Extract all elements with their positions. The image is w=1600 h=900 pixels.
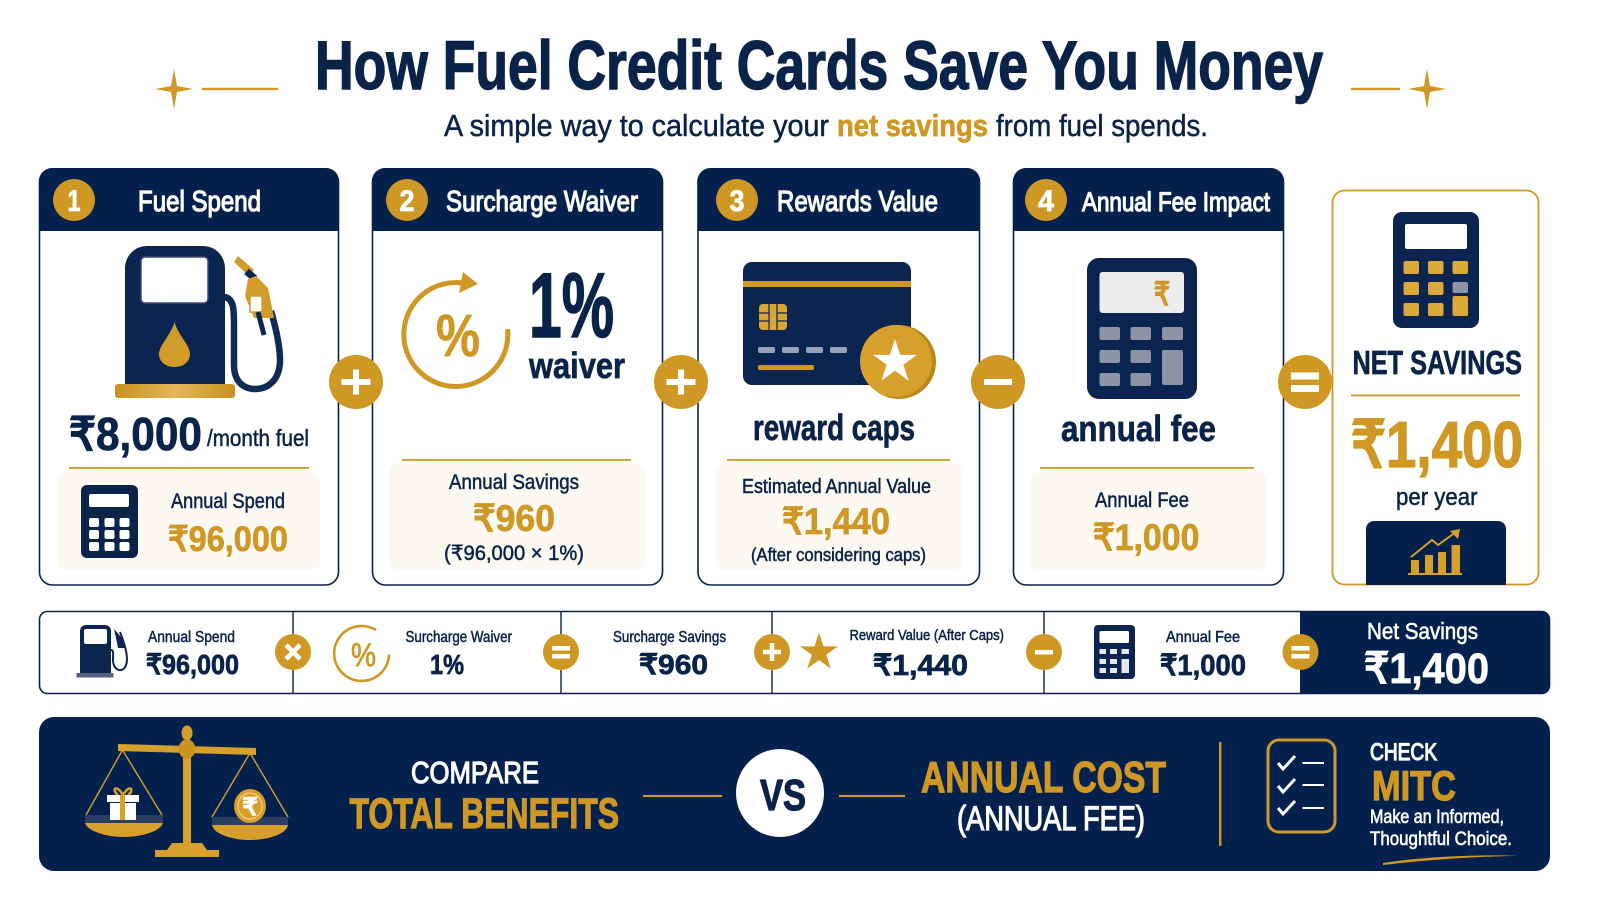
icon: calculator	[81, 485, 138, 558]
result: annual savings	[389, 463, 645, 570]
subtitle: net savings	[837, 108, 988, 143]
text: check MITC: Thoughtful Choice.	[1370, 829, 1512, 850]
result: annual fee: ₹1,000	[1093, 517, 1200, 558]
heading: surcharge waiver: Surcharge Waiver	[446, 186, 638, 218]
icon: star	[800, 632, 838, 669]
stat: monthly fuel: ₹8,000	[69, 408, 202, 460]
panel: compare banner	[39, 717, 1550, 871]
operator: equals	[543, 634, 579, 670]
panel: formula strip	[40, 611, 1550, 694]
item: annual fee: Annual Fee	[1166, 629, 1240, 646]
item: surcharge waiver: 1%	[430, 649, 464, 680]
icon: small percent: %	[351, 637, 376, 673]
item: annual fee: ₹1,000	[1160, 650, 1246, 682]
icon: rupee coin	[234, 789, 266, 823]
badge 4	[1025, 179, 1067, 221]
text: check MITC: CHECK	[1370, 739, 1437, 766]
heading: net savings: NET SAVINGS	[1352, 344, 1522, 381]
icon: gift	[107, 788, 139, 820]
item: surcharge waiver: Surcharge Waiver	[406, 629, 513, 646]
stat: 1% waiver	[528, 255, 625, 386]
stat: net savings amount: ₹1,400	[1351, 408, 1523, 481]
item: surcharge savings	[613, 629, 726, 680]
badge 3	[716, 179, 758, 221]
badge: vs	[736, 749, 824, 837]
icon: calculator with rupee: ₹	[1154, 276, 1170, 312]
item: annual spend: ₹96,000	[146, 649, 239, 680]
badge 3: 3	[730, 185, 744, 218]
operator: equals	[1278, 355, 1332, 409]
result: annual fee: Annual Fee	[1095, 489, 1189, 512]
panel: net savings	[1332, 190, 1538, 585]
heading: fuel spend: Fuel Spend	[138, 186, 261, 218]
icon: fuel pump	[115, 246, 280, 398]
result: annual savings: ₹960	[473, 498, 555, 539]
icon: percent cycle	[404, 272, 508, 386]
item: annual fee	[1160, 629, 1246, 682]
item: reward value: Reward Value (After Caps)	[850, 627, 1004, 644]
result: estimated annual value: Estimated Annual Value	[742, 476, 931, 498]
item: surcharge waiver	[406, 629, 513, 680]
text: annual cost	[921, 753, 1166, 838]
label: reward caps: reward caps	[753, 407, 915, 448]
text: compare total benefits: COMPARE	[411, 755, 539, 790]
stat: 1% waiver: 1%	[529, 255, 614, 357]
stat: 1% waiver: waiver	[528, 345, 625, 386]
label: annual fee: annual fee	[1061, 408, 1216, 449]
stat: monthly fuel	[69, 408, 309, 460]
operator: plus	[754, 634, 790, 670]
stat: monthly fuel: /month fuel	[207, 425, 309, 451]
item: net savings: Net Savings	[1367, 618, 1478, 644]
operator: minus	[1026, 634, 1062, 670]
result: annual savings: (₹96,000 × 1%)	[444, 542, 584, 565]
operator: times	[275, 634, 311, 670]
text: check MITC: Make an Informed,	[1370, 807, 1504, 828]
badge 2: 2	[400, 185, 414, 218]
subtitle	[444, 108, 1208, 143]
icon: small pump	[76, 625, 127, 678]
panel: step 2 surcharge waiver	[372, 168, 663, 585]
badge 1	[53, 179, 95, 221]
operator: minus	[971, 355, 1025, 409]
badge: vs: VS	[760, 771, 806, 820]
badge 4: 4	[1038, 185, 1054, 218]
item: surcharge savings: ₹960	[639, 649, 708, 680]
panel: step 3 rewards value	[698, 168, 980, 585]
text: annual cost: (ANNUAL FEE)	[957, 800, 1145, 838]
item: net savings	[1364, 618, 1489, 693]
operator: equals	[1282, 634, 1318, 670]
result: annual spend: Annual Spend	[171, 490, 285, 513]
icon: small percent	[330, 622, 393, 685]
decoration: right sparkle	[1351, 69, 1446, 109]
panel: step 1 fuel spend	[39, 168, 339, 585]
item: net savings: ₹1,400	[1364, 645, 1489, 693]
item: reward value	[850, 627, 1004, 682]
item: annual spend: Annual Spend	[148, 629, 235, 646]
label: per year: per year	[1396, 484, 1478, 511]
text: annual cost: ANNUAL COST	[921, 753, 1166, 802]
result: annual savings: Annual Savings	[449, 471, 579, 494]
operator: plus	[329, 355, 383, 409]
heading: annual fee impact: Annual Fee Impact	[1082, 187, 1270, 217]
icon: credit card with star coin	[743, 262, 936, 399]
text: compare total benefits: TOTAL BENEFITS	[350, 790, 619, 838]
result: estimated annual value: ₹1,440	[782, 501, 890, 542]
icon: growth chart	[1366, 521, 1506, 585]
icon: gold calculator	[1393, 212, 1479, 328]
icon: calculator with rupee	[1087, 258, 1197, 399]
item: annual spend	[146, 629, 239, 680]
item: surcharge savings: Surcharge Savings	[613, 629, 726, 646]
result: estimated annual value: (After considering caps)	[751, 545, 926, 565]
icon: percent cycle: %	[436, 303, 480, 369]
title: How Fuel Credit Cards Save You Money	[315, 27, 1323, 104]
icon: rupee coin: ₹	[242, 794, 258, 821]
operator: plus	[654, 355, 708, 409]
icon: small calculator	[1094, 625, 1135, 679]
icon: balance scale	[85, 726, 288, 857]
text: compare total benefits	[350, 755, 619, 838]
decoration: left sparkle	[155, 69, 278, 109]
result: annual spend	[57, 472, 320, 570]
result: annual fee	[1030, 472, 1267, 570]
decoration: gold swoosh	[1383, 855, 1519, 865]
subtitle: A simple way to calculate your	[444, 108, 829, 143]
result: estimated annual value	[716, 463, 962, 570]
heading: rewards value: Rewards Value	[777, 186, 938, 218]
icon: checklist	[1268, 740, 1335, 832]
badge 1: 1	[68, 185, 80, 218]
subtitle: from fuel spends.	[996, 108, 1208, 143]
text: check MITC	[1370, 739, 1512, 850]
text: check MITC: MITC	[1372, 762, 1456, 809]
badge 2	[386, 179, 428, 221]
item: reward value: ₹1,440	[873, 650, 968, 682]
panel: step 4 annual fee impact	[1013, 168, 1284, 585]
result: annual spend: ₹96,000	[168, 520, 288, 559]
